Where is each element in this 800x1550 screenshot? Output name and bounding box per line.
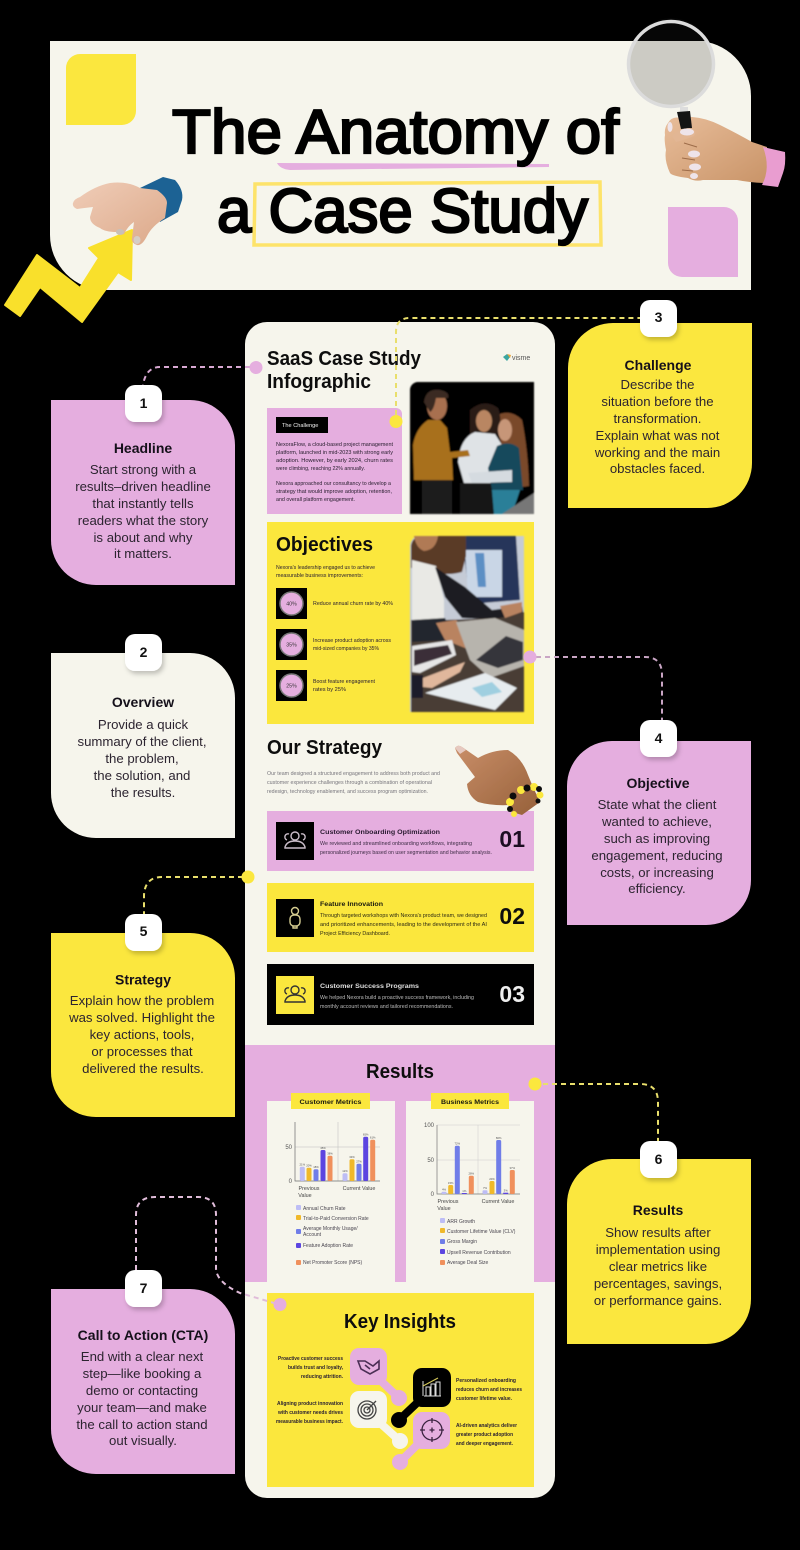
panel: the challenge: and overall platform engagement. bbox=[276, 497, 355, 503]
panel: objectives: measurable business improvements: bbox=[276, 573, 363, 579]
chart: customer metrics: 65% bbox=[363, 1132, 369, 1136]
panel: case study sample bbox=[245, 322, 555, 1498]
heading: results: Results bbox=[366, 1060, 434, 1083]
callout 3: challenge bbox=[568, 300, 752, 508]
panel: objectives: Boost feature engagement bbox=[313, 679, 376, 685]
callout 1: headline: 1 bbox=[140, 395, 148, 411]
callout 6: results: Results bbox=[633, 1202, 683, 1218]
card: onboarding bbox=[267, 811, 534, 871]
panel: the challenge bbox=[267, 408, 402, 514]
icon: 35% ring bbox=[276, 629, 307, 660]
chart: business metrics: 3% bbox=[504, 1188, 508, 1192]
callout 1: headline: is about and why bbox=[94, 530, 193, 545]
callout 1: headline: Start strong with a bbox=[90, 462, 197, 477]
legend: customer metrics: Account bbox=[303, 1232, 322, 1238]
callout 3: challenge: situation before the bbox=[601, 394, 714, 409]
icon: handshake bbox=[358, 1361, 379, 1374]
legend: customer metrics: Feature Adoption Rate bbox=[303, 1243, 353, 1249]
chart: customer metrics: 50 bbox=[285, 1145, 293, 1151]
card: feature innovation: Feature Innovation bbox=[320, 901, 383, 908]
callout 4: objective: 4 bbox=[655, 730, 663, 746]
callout 1: headline: readers what the story bbox=[78, 513, 209, 528]
photo: team around laptop bbox=[410, 536, 524, 712]
chart: customer metrics: Customer Metrics bbox=[300, 1099, 362, 1106]
callout 3: challenge: Challenge bbox=[625, 357, 692, 373]
icon: hand pinching arrow bbox=[73, 177, 182, 245]
card: onboarding: We reviewed and streamlined onboarding workflows, integrating bbox=[320, 841, 472, 847]
title highlight box bbox=[254, 182, 601, 245]
decorative yellow square bbox=[66, 54, 136, 125]
icon: 25% ring: 25% bbox=[286, 684, 297, 690]
connector: strategy bbox=[144, 870, 254, 914]
panel: objectives: mid-sized companies by 35% bbox=[313, 646, 380, 652]
callout 6: results bbox=[567, 1141, 751, 1344]
text: right insights: customer lifetime value. bbox=[456, 1396, 513, 1402]
photo: three colleagues bbox=[410, 382, 534, 514]
callout 7: call to action: your team—and make bbox=[77, 1400, 207, 1415]
text: left insights: with customer needs drives bbox=[277, 1410, 343, 1416]
card: feature innovation bbox=[267, 883, 534, 952]
callout 7: call to action: Call to Action (CTA) bbox=[78, 1327, 208, 1343]
chart: business metrics: 80% bbox=[496, 1136, 502, 1140]
callout 7: call to action: the call to action stand bbox=[76, 1417, 208, 1432]
callout 2: overview: the results. bbox=[111, 785, 175, 800]
callout 1: headline: results–driven headline bbox=[75, 479, 211, 494]
callout 1: headline: Headline bbox=[114, 440, 172, 456]
callout 7: call to action: 7 bbox=[140, 1280, 148, 1296]
callout 6: results: percentages, savings, bbox=[594, 1276, 722, 1291]
legend: business metrics: Gross Margin bbox=[447, 1239, 477, 1245]
callout 5: strategy: key actions, tools, bbox=[90, 1027, 194, 1042]
panel: key insights bbox=[267, 1293, 534, 1487]
chart: business metrics: Previous bbox=[438, 1199, 459, 1205]
icon: bar chart bbox=[423, 1378, 441, 1396]
callout 7: call to action: out visually. bbox=[109, 1433, 177, 1448]
chart: customer metrics: Value bbox=[298, 1193, 312, 1199]
chart: business metrics: 28% bbox=[468, 1172, 475, 1176]
chart: business metrics: 1% bbox=[462, 1189, 467, 1193]
text: left insights: Aligning product innovation bbox=[277, 1401, 343, 1407]
panel: objectives: Nexora's leadership engaged us to achieve bbox=[276, 565, 375, 571]
text: right insights: reduces churn and increases bbox=[456, 1387, 522, 1393]
panel: the challenge: were climbing, reaching 22% annually. bbox=[276, 466, 365, 472]
chart: business metrics: 20% bbox=[489, 1177, 495, 1181]
panel: the challenge: The Challenge bbox=[282, 423, 318, 429]
legend: customer metrics bbox=[296, 1205, 369, 1266]
logo: visme: visme bbox=[512, 355, 530, 362]
chart: customer metrics: 20% bbox=[306, 1164, 312, 1168]
chart: customer metrics: 33% bbox=[349, 1155, 355, 1159]
callout 3: challenge: obstacles faced. bbox=[610, 461, 705, 476]
card: feature innovation: Project Efficiency Dashboard. bbox=[320, 931, 390, 937]
chart: customer metrics: 12% bbox=[342, 1169, 348, 1173]
callout 6: results: or performance gains. bbox=[594, 1293, 722, 1308]
chart: business metrics: 0 bbox=[431, 1192, 435, 1198]
callout 2: overview: Provide a quick bbox=[98, 717, 188, 732]
text: left insights: Proactive customer success bbox=[278, 1356, 343, 1362]
chart: customer metrics: Current Value bbox=[343, 1186, 375, 1192]
icon: 25% ring bbox=[276, 670, 307, 701]
callout 4: objective: costs, or increasing bbox=[600, 865, 714, 880]
callout 7: call to action bbox=[51, 1270, 235, 1474]
chart: customer metrics: 27% bbox=[356, 1160, 362, 1164]
logo: visme bbox=[503, 354, 530, 362]
callout 4: objective: such as improving bbox=[604, 831, 710, 846]
callout 4: objective bbox=[567, 720, 751, 925]
icon: people bbox=[285, 832, 305, 848]
callout 4: objective: wanted to achieve, bbox=[601, 814, 712, 829]
diagram: connected blobs bbox=[350, 1348, 451, 1470]
legend: customer metrics: Average Monthly Usage/ bbox=[303, 1226, 358, 1232]
callout 4: objective: State what the client bbox=[598, 797, 717, 812]
chart: business metrics: Value bbox=[437, 1206, 451, 1212]
decorative pink square bbox=[668, 207, 738, 277]
chart: business metrics: 50 bbox=[427, 1158, 435, 1164]
callout 5: strategy: Explain how the problem bbox=[70, 993, 214, 1008]
callout 1: headline: that instantly tells bbox=[92, 496, 194, 511]
card: customer success: We helped Nexora build a proactive success framework, including bbox=[320, 995, 474, 1001]
panel: the challenge: Nexora approached our consultancy to develop a bbox=[276, 481, 391, 487]
card: customer success: 03 bbox=[499, 981, 525, 1007]
callout 6: results: Show results after bbox=[605, 1225, 711, 1240]
chart: business metrics: 7% bbox=[483, 1186, 488, 1190]
connector: headline bbox=[143, 361, 262, 385]
chart: customer metrics: 61% bbox=[370, 1136, 376, 1140]
card: customer success: Customer Success Programs bbox=[320, 983, 419, 990]
callout 2: overview: the problem, bbox=[105, 751, 179, 766]
callout 5: strategy bbox=[51, 914, 235, 1117]
legend: business metrics: Customer Lifetime Value (CLV) bbox=[447, 1229, 516, 1235]
text: right insights: Personalized onboarding bbox=[456, 1378, 516, 1384]
chart: customer metrics: Previous bbox=[299, 1186, 320, 1192]
chart: business metrics: 37% bbox=[509, 1166, 516, 1170]
callout 2: overview: summary of the client, bbox=[78, 734, 206, 749]
panel: the challenge: platform, launched in mid-2023 with strong early bbox=[276, 450, 394, 456]
icon: pointing hand with bracelet bbox=[455, 746, 544, 817]
callout 1: headline: it matters. bbox=[114, 546, 172, 561]
callout 6: results: clear metrics like bbox=[609, 1259, 707, 1274]
legend: business metrics: Average Deal Size bbox=[447, 1260, 489, 1266]
heading: case study title: Infographic bbox=[267, 370, 371, 393]
icon: crosshair bbox=[420, 1418, 444, 1442]
connector: challenge bbox=[390, 318, 640, 428]
legend: business metrics: Upsell Revenue Contribution bbox=[447, 1250, 511, 1256]
chart: customer metrics: 0 bbox=[289, 1179, 293, 1185]
panel: objectives: Increase product adoption across bbox=[313, 638, 392, 644]
callout 3: challenge: Describe the bbox=[620, 377, 695, 392]
callout 3: challenge: working and the main bbox=[594, 445, 720, 460]
woman on the right bbox=[496, 413, 529, 488]
chart: business metrics: Business Metrics bbox=[441, 1099, 499, 1106]
icon: 35% ring: 35% bbox=[286, 642, 297, 648]
card: customer success: monthly account reviews and tailored recommendations. bbox=[320, 1004, 453, 1010]
icon: lightbulb bbox=[290, 908, 300, 928]
panel: the challenge: strategy that would improve adoption, retention, bbox=[276, 489, 392, 495]
callout 4: objective: efficiency. bbox=[628, 881, 686, 896]
callout 5: strategy: 5 bbox=[140, 923, 148, 939]
chart: customer metrics: 21% bbox=[299, 1162, 306, 1166]
legend: business metrics: ARR Growth bbox=[447, 1219, 475, 1225]
callout 7: call to action: step—like booking a bbox=[83, 1366, 202, 1381]
heading: case study title: SaaS Case Study bbox=[267, 347, 422, 370]
callout 3: challenge: transformation. bbox=[614, 411, 701, 426]
title underline bbox=[277, 163, 549, 170]
text: left insights: reducing attrition. bbox=[301, 1374, 344, 1380]
text: left insights: measurable business impact. bbox=[276, 1419, 344, 1425]
card: onboarding: Customer Onboarding Optimization bbox=[320, 829, 440, 836]
callout 5: strategy: Strategy bbox=[115, 972, 171, 988]
callout 5: strategy: or processes that bbox=[91, 1044, 193, 1059]
icon: 40% ring bbox=[276, 588, 307, 619]
callout 2: overview: Overview bbox=[112, 694, 174, 710]
chart: business metrics bbox=[406, 1093, 534, 1282]
card: feature innovation: and prioritized enhancements, leading to the development of the AI bbox=[320, 922, 487, 928]
card: customer success bbox=[267, 964, 534, 1025]
icon: people group bbox=[285, 986, 305, 1002]
legend: customer metrics: Trial-to-Paid Conversion Rate bbox=[303, 1216, 369, 1222]
callout 6: results: 6 bbox=[655, 1151, 663, 1167]
panel: objectives: Reduce annual churn rate by 40% bbox=[313, 601, 394, 607]
title: The Anatomy of bbox=[172, 98, 620, 167]
callout 7: call to action: demo or contacting bbox=[86, 1383, 198, 1398]
callout 4: objective: engagement, reducing bbox=[591, 848, 723, 863]
callout 2: overview: 2 bbox=[140, 644, 148, 660]
callout 1: headline bbox=[51, 385, 235, 585]
title: a Case Study bbox=[217, 177, 588, 246]
chart: business metrics: 72% bbox=[454, 1142, 461, 1146]
callout 2: overview: the solution, and bbox=[94, 768, 190, 783]
text: right insights: AI-driven analytics deliver bbox=[456, 1423, 517, 1429]
callout 7: call to action: End with a clear next bbox=[81, 1349, 204, 1364]
chart: customer metrics: 45% bbox=[320, 1146, 326, 1150]
panel: results bbox=[245, 1045, 555, 1282]
card: feature innovation: Through targeted workshops with Nexora's product team, we designed bbox=[320, 913, 487, 919]
icon: hand holding magnifier bbox=[628, 18, 785, 187]
callout 2: overview bbox=[51, 634, 235, 838]
connector: objective bbox=[524, 650, 662, 720]
heading: our strategy: Our Strategy bbox=[267, 736, 383, 759]
chart: customer metrics: 38% bbox=[327, 1152, 333, 1156]
callout 4: objective: Objective bbox=[626, 775, 690, 791]
card: onboarding: 01 bbox=[499, 826, 525, 852]
panel: objectives bbox=[267, 522, 534, 724]
callout 3: challenge: Explain what was not bbox=[596, 428, 720, 443]
card: onboarding: personalized journeys based on user segmentation and behavior analysis. bbox=[320, 850, 492, 856]
icon: yellow growth arrow bbox=[5, 230, 132, 322]
chart: business metrics: 15% bbox=[448, 1181, 454, 1185]
connector: call to action bbox=[136, 1197, 286, 1311]
legend: customer metrics: Annual Churn Rate bbox=[303, 1206, 346, 1212]
text: strategy intro: Our team designed a structured engagement to address both product and bbox=[267, 771, 440, 777]
text: right insights: and deeper engagement. bbox=[456, 1441, 514, 1447]
chart: customer metrics: 18% bbox=[313, 1165, 319, 1169]
legend: customer metrics: Net Promoter Score (NPS) bbox=[303, 1260, 363, 1266]
text: right insights: greater product adoption bbox=[456, 1432, 513, 1438]
heading: objectives: Objectives bbox=[276, 533, 373, 556]
callout 3: challenge: 3 bbox=[655, 309, 663, 325]
text: left insights: builds trust and loyalty, bbox=[288, 1365, 344, 1371]
connector: results bbox=[528, 1078, 658, 1141]
callout 5: strategy: delivered the results. bbox=[82, 1061, 204, 1076]
card: feature innovation: 02 bbox=[499, 903, 525, 929]
heading: key insights: Key Insights bbox=[344, 1310, 456, 1333]
panel: the challenge: adoption. However, by early 2024, churn rates bbox=[276, 458, 394, 464]
chart: customer metrics bbox=[267, 1093, 395, 1282]
legend: business metrics bbox=[440, 1218, 516, 1266]
callout 6: results: implementation using bbox=[596, 1242, 720, 1257]
icon: target bbox=[358, 1401, 376, 1419]
callout 5: strategy: was solved. Highlight the bbox=[68, 1010, 215, 1025]
panel: header bbox=[50, 41, 751, 290]
panel: objectives: rates by 25% bbox=[313, 687, 347, 693]
panel: the challenge: NexoraFlow, a cloud-based project management bbox=[276, 442, 394, 448]
chart: business metrics: 4% bbox=[442, 1188, 447, 1192]
text: strategy intro: customer experience challenges through a combination of operational bbox=[267, 780, 432, 786]
icon: 40% ring: 40% bbox=[286, 602, 297, 608]
text: strategy intro: redesign, technology enablement, and success program optimization. bbox=[267, 789, 428, 795]
chart: business metrics: Current Value bbox=[482, 1199, 514, 1205]
chart: business metrics: 100 bbox=[424, 1123, 435, 1129]
